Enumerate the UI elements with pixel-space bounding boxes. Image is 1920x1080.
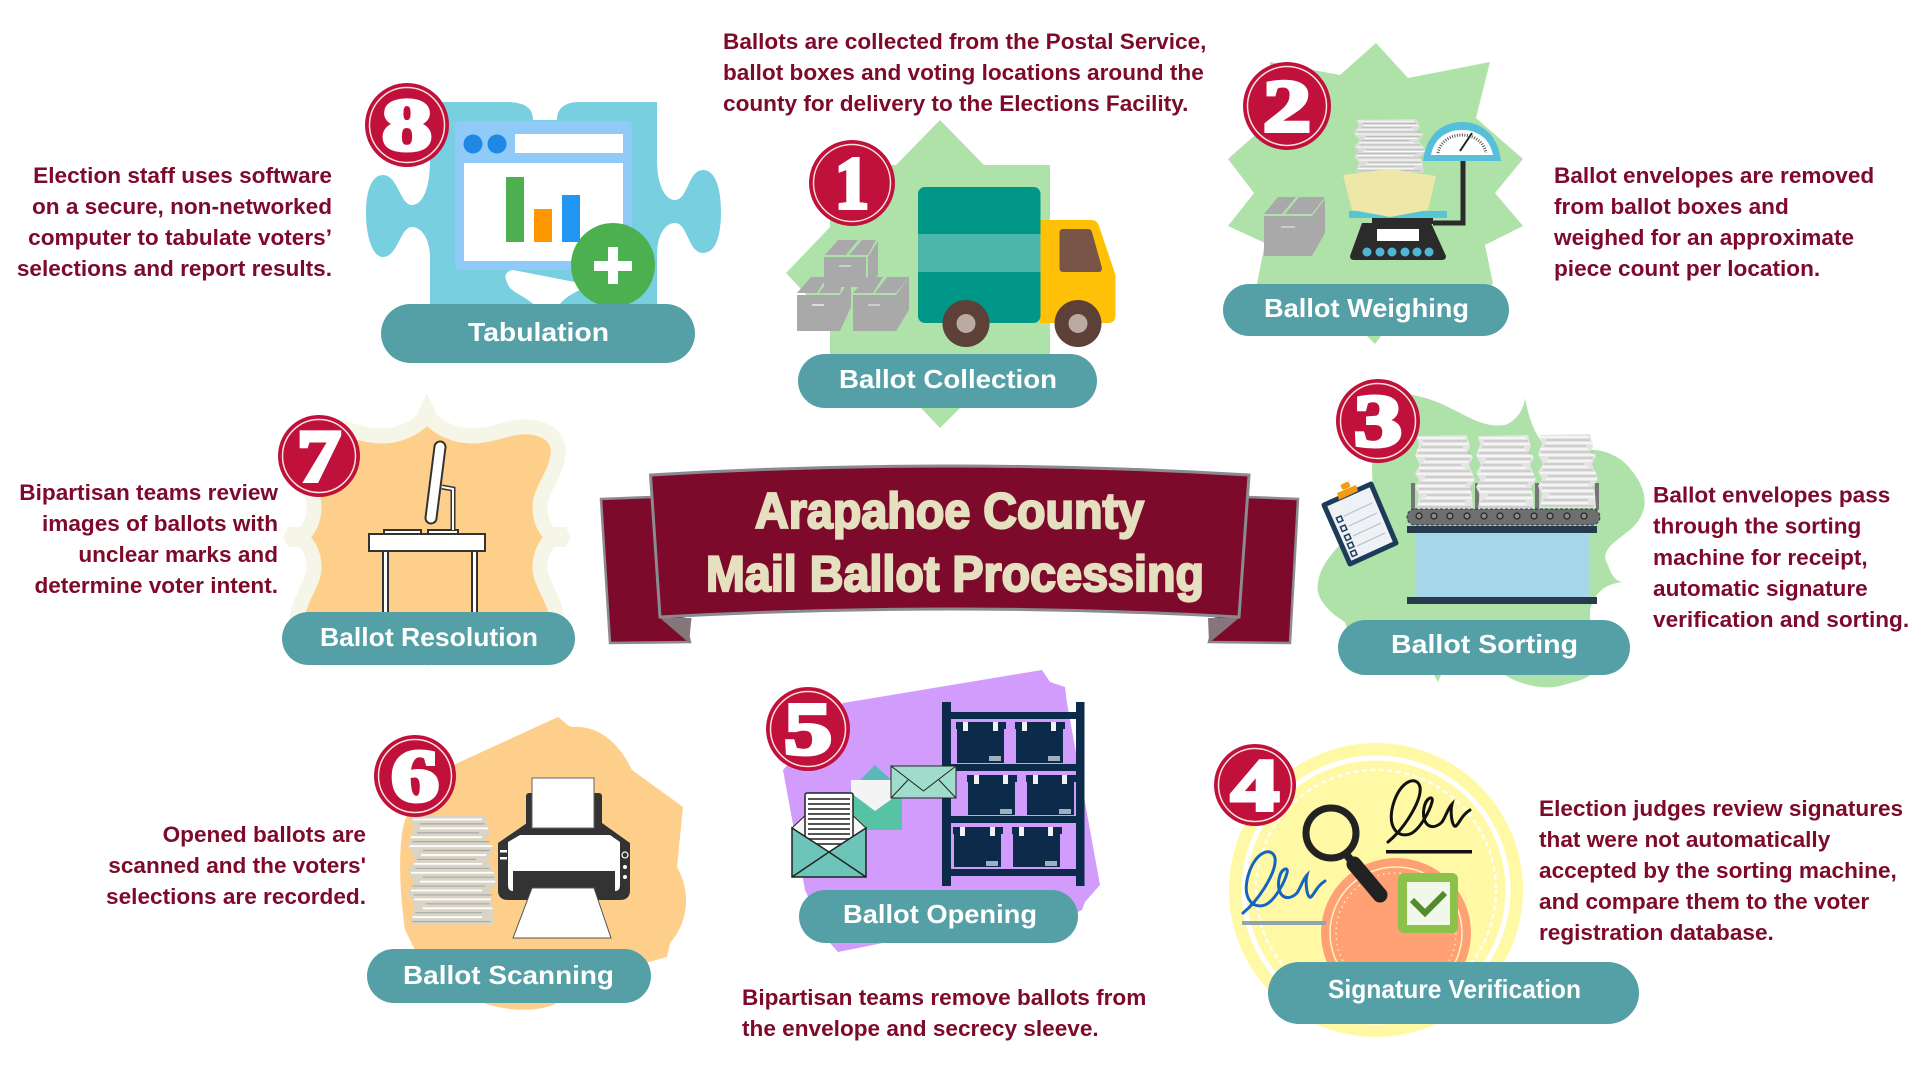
- icon: magnifying glass: [1306, 808, 1380, 895]
- label pill: ballot resolution: [282, 612, 575, 665]
- panel: step 3 ballot sorting: [1317, 379, 1645, 687]
- icon: stacked boxes: [797, 240, 909, 331]
- icon: envelopes on scale plate: [1343, 169, 1447, 218]
- label pill: signature verification: [1268, 962, 1639, 1024]
- number badge 6: [374, 735, 456, 818]
- panel: step 1 ballot collection: [786, 120, 1116, 428]
- title: [706, 483, 1204, 602]
- green star background: [786, 120, 1050, 428]
- green blob background: [1317, 393, 1645, 687]
- text: step 2 description: from ballot boxes and: [1554, 194, 1789, 219]
- number badge 5: 5: [784, 689, 832, 771]
- number badge 1: [809, 140, 895, 226]
- number badge 2: [1243, 62, 1331, 150]
- icon: back envelope with letter: [850, 765, 902, 830]
- ornate orange background: [296, 415, 558, 625]
- yellow dotted circle background: [1229, 743, 1523, 1037]
- label pill: ballot scanning: Ballot Scanning: [403, 960, 614, 990]
- green star background: [1228, 43, 1523, 344]
- title: Mail Ballot Processing: [706, 546, 1204, 602]
- text: step 1 description: Ballots are collected from the Postal Service,: [723, 29, 1206, 54]
- label pill: ballot resolution: Ballot Resolution: [320, 622, 538, 652]
- banner left tail: [601, 497, 690, 643]
- label pill: ballot collection: Ballot Collection: [839, 364, 1057, 394]
- label pill: ballot sorting: [1338, 620, 1630, 675]
- text: step 1 description: ballot boxes and voting locations around the: [723, 60, 1204, 85]
- label pill: tabulation: [381, 304, 695, 363]
- icon: delivery truck: [918, 187, 1116, 347]
- label pill: ballot weighing: [1223, 284, 1509, 336]
- banner main band: [650, 466, 1249, 617]
- icon: open envelope with ballot: [792, 793, 866, 877]
- text: step 8 description: computer to tabulate voters’: [28, 225, 332, 250]
- text: step 5 description: the envelope and secrecy sleeve.: [742, 1016, 1099, 1041]
- banner right tail: [1209, 497, 1298, 643]
- label pill: ballot opening: [799, 890, 1078, 943]
- text: step 3 description: through the sorting: [1653, 514, 1861, 538]
- label pill: tabulation: Tabulation: [468, 317, 609, 347]
- title: Arapahoe County: [755, 483, 1144, 539]
- icon: green check box: [1398, 873, 1458, 933]
- number badge 7: [278, 415, 360, 498]
- ornate cream outline spikes: [283, 393, 571, 668]
- icon: printer: [498, 778, 630, 938]
- text: step 3 description: machine for receipt,: [1653, 545, 1868, 570]
- banner folds: [660, 618, 1239, 643]
- text: step 7 description: Bipartisan teams review: [19, 480, 278, 505]
- number badge 3: 3: [1354, 381, 1402, 463]
- label pill: ballot scanning: [367, 949, 651, 1003]
- blue puzzle piece background: [366, 102, 721, 304]
- purple background: [783, 670, 1100, 952]
- icon: desk with computer: [369, 447, 485, 613]
- text: step 8 description: on a secure, non-networked: [32, 194, 332, 219]
- panel: step 5 ballot opening: [766, 670, 1100, 952]
- label pill: ballot opening: Ballot Opening: [843, 899, 1037, 929]
- orange blob background: [400, 717, 686, 1010]
- label pill: ballot weighing: Ballot Weighing: [1264, 293, 1469, 323]
- icon: clipboard checklist: [1324, 481, 1396, 564]
- number badge 4: 4: [1231, 745, 1279, 827]
- panel: step 8 tabulation: [365, 83, 721, 363]
- text: step 6 description: selections are recorded.: [106, 884, 366, 909]
- number badge 2: 2: [1263, 66, 1311, 148]
- text: step 3 description: verification and sorting.: [1653, 607, 1909, 632]
- text: step 3 description: Ballot envelopes pass: [1653, 482, 1890, 508]
- text: step 4 description: registration database.: [1539, 920, 1774, 945]
- icon: green plus circle: [571, 223, 655, 307]
- text: step 4 description: Election judges review signatures: [1539, 796, 1903, 821]
- number badge 8: [365, 83, 449, 167]
- text: step 5 description: Bipartisan teams remove ballots from: [742, 985, 1146, 1010]
- text: step 2 description: piece count per location.: [1554, 256, 1820, 281]
- number badge 4: [1214, 744, 1296, 827]
- text: step 6 description: scanned and the voters': [108, 853, 366, 878]
- text: step 4 description: that were not automatically: [1539, 827, 1831, 852]
- label pill: ballot sorting: Ballot Sorting: [1391, 629, 1578, 659]
- text: step 1 description: county for delivery to the Elections Facility.: [723, 91, 1188, 116]
- icon: storage shelves with boxes: [942, 702, 1084, 886]
- panel: step 6 ballot scanning: [367, 717, 686, 1010]
- text: step 3 description: automatic signature: [1653, 576, 1868, 601]
- panel: step 4 signature verification: [1214, 743, 1639, 1037]
- number badge 3: [1336, 379, 1420, 463]
- text: step 2 description: Ballot envelopes are removed: [1554, 163, 1874, 188]
- panel: step 7 ballot resolution: [278, 393, 575, 668]
- text: step 7 description: unclear marks and: [78, 542, 278, 567]
- icon: browser window with bar chart: [455, 121, 632, 270]
- text: step 6 description: Opened ballots are: [163, 822, 366, 847]
- icon: sorting machine: [1407, 434, 1600, 604]
- number badge 5: [766, 687, 850, 771]
- icon: closed envelope: [891, 766, 956, 798]
- text: step 2 description: weighed for an approximate: [1553, 225, 1854, 250]
- label pill: ballot collection: [798, 354, 1097, 408]
- text: step 8 description: selections and report results.: [17, 256, 332, 281]
- label pill: signature verification: Signature Verification: [1328, 974, 1581, 1004]
- icon: paper stack: [408, 815, 497, 925]
- text: step 7 description: determine voter intent.: [34, 573, 278, 598]
- icon: paper stack: [1354, 119, 1426, 172]
- number badge 8: 8: [382, 85, 432, 167]
- panel: step 2 ballot weighing: [1223, 43, 1523, 344]
- text: step 7 description: images of ballots with: [42, 511, 278, 536]
- text: step 4 description: accepted by the sorting machine,: [1539, 858, 1897, 883]
- icon: grey box: [1264, 197, 1325, 256]
- text: step 4 description: and compare them to the voter: [1539, 889, 1869, 914]
- icon: digital scale: [1350, 122, 1501, 260]
- number badge 7: 7: [297, 416, 341, 498]
- icon: blue signature: [1242, 852, 1326, 925]
- title banner: [601, 466, 1298, 643]
- text: step 8 description: Election staff uses software: [33, 163, 332, 188]
- number badge 6: 6: [391, 736, 439, 818]
- icon: black signature: [1386, 781, 1472, 854]
- number badge 1: 1: [835, 143, 869, 225]
